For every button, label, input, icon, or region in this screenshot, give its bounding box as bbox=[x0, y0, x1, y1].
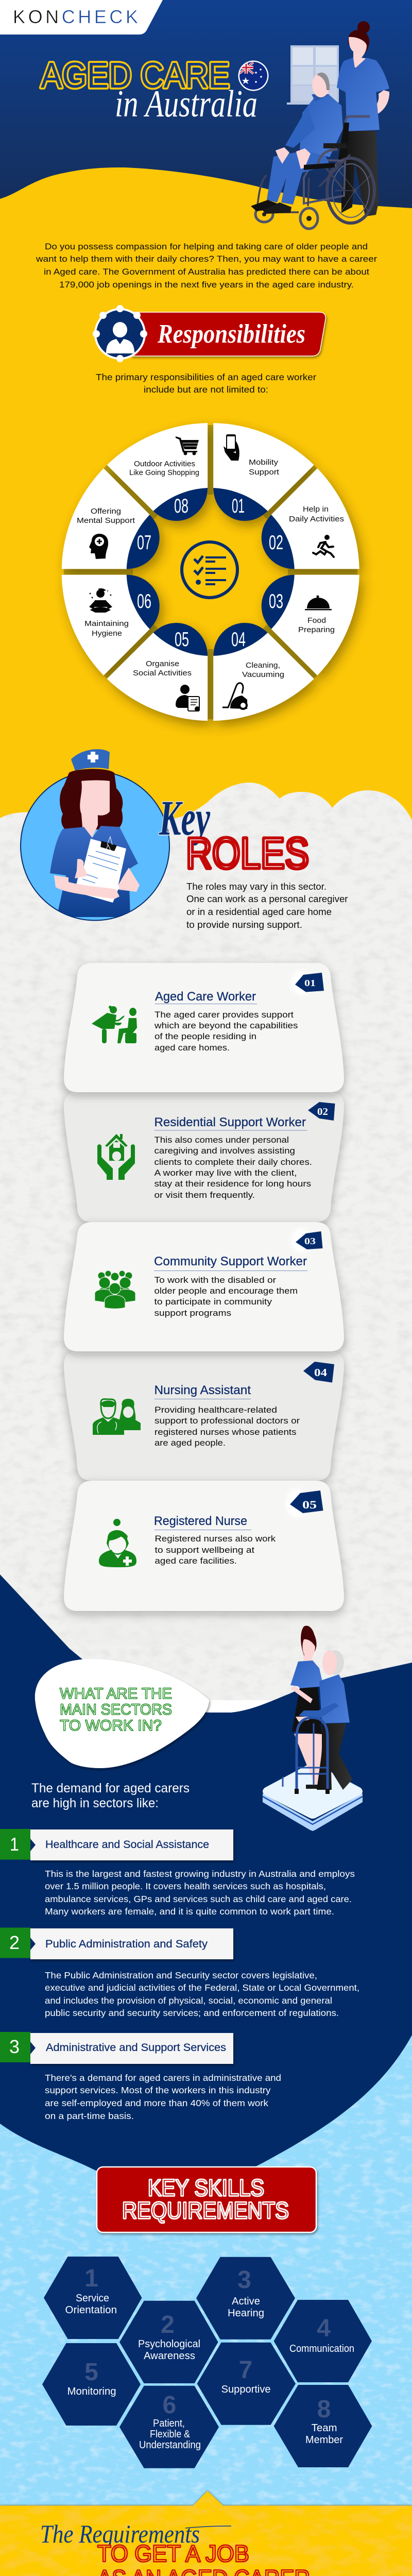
sector 3 bbox=[0, 2032, 281, 2121]
icon: doctor and nurse bbox=[93, 1399, 141, 1435]
wheel labels: Cleaning, bbox=[246, 662, 280, 670]
heading: to get a job as an aged carer bbox=[97, 2540, 310, 2576]
illustration: window bbox=[287, 45, 339, 105]
roles intro text: One can work as a personal caregiver bbox=[186, 894, 348, 904]
sector 1 body: over 1.5 million people. It covers health services such as hospitals, bbox=[45, 1881, 326, 1891]
sector 2 body: and includes the provision of physical, social, economic and general bbox=[45, 1995, 332, 2006]
roles intro text bbox=[186, 882, 348, 930]
body text: which are beyond the capabilities bbox=[154, 1021, 298, 1030]
responsibilities banner: Responsibilities bbox=[157, 319, 305, 349]
responsibilities intro text bbox=[96, 372, 316, 395]
tag 01 bbox=[291, 971, 324, 995]
hexagon 7: Supportive bbox=[221, 2384, 271, 2395]
icon: carer feeding client bbox=[92, 1006, 137, 1043]
wheel labels: Daily Activities bbox=[289, 515, 344, 523]
title: roles: ROLES bbox=[186, 829, 309, 877]
card: residential support worker bbox=[64, 1092, 344, 1222]
hexagon 1 bbox=[44, 2257, 142, 2339]
sector 1 body: This is the largest and fastest growing industry in Australia and employs bbox=[45, 1869, 355, 1879]
responsibilities wheel bbox=[62, 423, 359, 721]
wheel segments bbox=[62, 423, 359, 721]
sector 2 bar: Public Administration and Safety bbox=[45, 1938, 208, 1950]
hexagon 7: 7 bbox=[239, 2357, 252, 2384]
sector 3 body: support services. Most of the workers in this industry bbox=[45, 2085, 271, 2095]
hexagon 3: Active bbox=[232, 2296, 260, 2307]
body text bbox=[154, 1534, 276, 1566]
heading: Aged Care Worker bbox=[155, 990, 256, 1004]
wheel labels: Hygiene bbox=[92, 630, 122, 638]
sector 3 body: There's a demand for aged carers in administrative and bbox=[45, 2073, 281, 2083]
body text: A worker may live with the client, bbox=[154, 1168, 297, 1178]
icon: head with cross bbox=[89, 534, 108, 559]
key skills banner bbox=[97, 2167, 316, 2232]
tag 05: 05 bbox=[302, 1498, 317, 1511]
heading: Residential Support Worker bbox=[154, 1115, 306, 1129]
body text: of the people residing in bbox=[154, 1031, 256, 1041]
wheel labels: Vacuuming bbox=[242, 671, 284, 679]
illustration: carer with walker on platform bbox=[263, 1625, 363, 1831]
sector 3 bar: 3 bbox=[9, 2036, 20, 2057]
demand text: are high in sectors like: bbox=[31, 1796, 159, 1810]
wheel labels: Maintaining bbox=[84, 620, 129, 628]
sector 1 bar: 1 bbox=[10, 1834, 19, 1855]
wheel labels: Food bbox=[307, 617, 326, 625]
wheel labels: Preparing bbox=[298, 626, 335, 634]
script heading: the requirements: The Requirements bbox=[40, 2519, 200, 2548]
roles intro text: The roles may vary in this sector. bbox=[186, 882, 327, 892]
hexagon 7 bbox=[197, 2343, 296, 2425]
navy section background bbox=[0, 1574, 412, 2188]
tag 01: 01 bbox=[304, 978, 316, 988]
body text: support programs bbox=[154, 1308, 231, 1318]
wheel labels bbox=[77, 459, 344, 679]
icon: house in hands bbox=[97, 1134, 135, 1180]
wheel numbers: 07 bbox=[137, 532, 151, 554]
sector 3 body bbox=[45, 2073, 281, 2121]
wheel labels: Help in bbox=[303, 505, 329, 514]
wheel labels: Support bbox=[249, 468, 279, 477]
title: roles: ROLES bbox=[186, 829, 309, 877]
heading: to get a job as an aged carer: TO GET A JOB bbox=[97, 2540, 249, 2567]
responsibilities banner bbox=[93, 305, 325, 362]
tag 03 bbox=[291, 1228, 322, 1253]
sector 1 bbox=[0, 1829, 355, 1917]
intro paragraph: in Aged care. The Government of Australia has predicted there can be about bbox=[44, 267, 369, 277]
intro paragraph bbox=[36, 242, 377, 290]
sector 1 body bbox=[45, 1869, 355, 1917]
icon: australian flag bbox=[238, 61, 269, 91]
icon: runner bbox=[313, 535, 334, 557]
illustration: carer and man in wheelchair bbox=[251, 21, 389, 229]
sector 2 bar: 2 bbox=[9, 1932, 20, 1953]
icon: registered nurse bbox=[99, 1519, 136, 1567]
sector 2 body bbox=[45, 1970, 359, 2018]
sector 1 bar bbox=[0, 1829, 233, 1860]
body text: aged care homes. bbox=[154, 1043, 230, 1053]
hexagon 6: Understanding bbox=[139, 2439, 201, 2451]
wheel numbers: 01 bbox=[232, 495, 245, 517]
header background bbox=[0, 0, 412, 216]
white bubble with heading: MAIN SECTORS bbox=[60, 1701, 172, 1718]
light blue section background bbox=[0, 2009, 412, 2509]
body text: older people and encourage them bbox=[154, 1286, 298, 1296]
logo panel bbox=[0, 0, 163, 35]
body text: are aged people. bbox=[154, 1438, 226, 1448]
sector 2 bbox=[0, 1928, 359, 2018]
white bubble with heading bbox=[35, 1659, 209, 1768]
body text: Registered nurses also work bbox=[154, 1534, 276, 1544]
hexagon 6: Flexible & bbox=[150, 2429, 191, 2440]
body text bbox=[154, 1275, 298, 1318]
wheel numbers: 06 bbox=[137, 590, 151, 613]
logo panel: KONCHECK bbox=[13, 6, 138, 27]
key skills banner: REQUIREMENTS bbox=[122, 2197, 289, 2224]
sector 1 bar: Healthcare and Social Assistance bbox=[45, 1839, 209, 1851]
wheel labels: Like Going Shopping bbox=[129, 469, 199, 477]
sector 3 body: on a part-time basis. bbox=[45, 2111, 134, 2121]
icon: vacuum cleaner bbox=[222, 683, 247, 709]
clipboard bbox=[75, 837, 126, 903]
intro paragraph: want to help them with their daily chores? Then, you may want to have a career bbox=[36, 254, 377, 264]
white bubble with heading: TO WORK IN? bbox=[60, 1717, 162, 1734]
body text: to participate in community bbox=[154, 1297, 272, 1307]
key skills banner: KEY SKILLS bbox=[148, 2175, 264, 2201]
hexagon 2: 2 bbox=[161, 2311, 175, 2338]
card: community support worker bbox=[64, 1222, 344, 1351]
grey paper section background bbox=[0, 783, 412, 1700]
heading: Community Support Worker bbox=[154, 1255, 307, 1268]
tag 02 bbox=[308, 1102, 335, 1121]
wheel numbers: 08 bbox=[174, 495, 188, 517]
wheel numbers bbox=[137, 495, 283, 651]
icon: phone in hand bbox=[224, 434, 239, 461]
icon: meditating person bbox=[89, 588, 112, 613]
body text: registered nurses whose patients bbox=[154, 1427, 297, 1437]
responsibilities intro text: include but are not limited to: bbox=[144, 384, 268, 395]
key skills banner: KEY SKILLS bbox=[148, 2175, 264, 2201]
hexagon 1: Service bbox=[76, 2293, 109, 2304]
key skills banner: REQUIREMENTS bbox=[122, 2197, 289, 2224]
white bubble with heading: WHAT ARE THE bbox=[60, 1685, 172, 1702]
sector 2 body: The Public Administration and Security sector covers legislative, bbox=[45, 1970, 317, 1980]
demand text bbox=[31, 1781, 190, 1810]
sector 2 body: executive and judicial activities of the Federal, State or Local Government, bbox=[45, 1982, 359, 1993]
hexagon 3: Hearing bbox=[228, 2308, 264, 2319]
hexagon 2: Awareness bbox=[144, 2350, 195, 2362]
heading: Registered Nurse bbox=[154, 1514, 247, 1528]
body text bbox=[154, 1405, 300, 1448]
white bubble with heading: TO WORK IN? bbox=[60, 1717, 162, 1734]
hexagon 3: 3 bbox=[237, 2266, 251, 2294]
sector 1 body: ambulance services, GPs and services such as child care and aged care. bbox=[45, 1894, 352, 1904]
hexagon 4: Communication bbox=[289, 2343, 354, 2354]
wheel labels: Mental Support bbox=[77, 517, 135, 525]
sector 3 bar bbox=[0, 2032, 233, 2064]
title: aged care: AGED CARE bbox=[41, 55, 230, 95]
icon: person with clipboard bbox=[176, 685, 200, 711]
body text: stay at their residence for long hours bbox=[154, 1179, 311, 1189]
hexagon 6 bbox=[119, 2386, 219, 2468]
body text: to support wellbeing at bbox=[154, 1545, 254, 1555]
faint paper edge below last card bbox=[64, 1611, 344, 1646]
body text: Providing healthcare-related bbox=[154, 1405, 277, 1415]
wheel labels: Organise bbox=[146, 660, 179, 668]
white bubble with heading: MAIN SECTORS bbox=[60, 1701, 172, 1718]
wheel numbers: 04 bbox=[231, 629, 246, 651]
body text: clients to complete their daily chores. bbox=[154, 1157, 312, 1167]
body text bbox=[154, 1010, 298, 1053]
title: in Australia: in Australia bbox=[115, 83, 258, 125]
hexagon 2 bbox=[119, 2301, 218, 2383]
body text bbox=[154, 1135, 312, 1200]
icon: nurse hat bbox=[71, 749, 110, 771]
card: aged care worker bbox=[64, 963, 344, 1092]
roles intro text: or in a residential aged care home bbox=[186, 907, 332, 917]
tag 02: 02 bbox=[317, 1106, 328, 1117]
intro paragraph: Do you possess compassion for helping and taking care of older people and bbox=[45, 242, 368, 251]
body text: or visit them frequently. bbox=[154, 1190, 255, 1200]
wheel labels: Social Activities bbox=[133, 669, 192, 677]
yellow requirements background bbox=[0, 2491, 412, 2576]
hexagon 4: 4 bbox=[317, 2315, 331, 2342]
title: key: Key bbox=[159, 790, 210, 845]
hexagon 8 bbox=[274, 2385, 372, 2467]
sector 2 bar bbox=[0, 1928, 233, 1959]
hexagon 6: Patient, bbox=[153, 2418, 185, 2429]
hexagon 8: 8 bbox=[317, 2396, 331, 2423]
hexagon 6: 6 bbox=[163, 2392, 176, 2419]
hexagon 8: Team bbox=[312, 2422, 337, 2434]
sector 2 body: public security and security services; and enforcement of regulations. bbox=[45, 2008, 339, 2018]
hexagon 2: Psychological bbox=[138, 2338, 200, 2350]
wheel numbers: 05 bbox=[175, 629, 189, 651]
wheel labels: Offering bbox=[91, 507, 121, 516]
hexagon 4 bbox=[274, 2300, 372, 2382]
hexagon 5: Monitoring bbox=[67, 2386, 116, 2397]
body text: To work with the disabled or bbox=[154, 1275, 276, 1285]
heading: to get a job as an aged carer: TO GET A JOB bbox=[97, 2540, 249, 2567]
icon: shopping cart bbox=[176, 436, 199, 455]
hexagon 5: 5 bbox=[84, 2359, 98, 2386]
tag 04: 04 bbox=[314, 1366, 328, 1379]
wheel labels: Mobility bbox=[249, 459, 279, 467]
body text: The aged carer provides support bbox=[154, 1010, 294, 1020]
body text: aged care facilities. bbox=[154, 1556, 237, 1566]
icon: person in circle bbox=[93, 305, 147, 362]
card: registered nurse bbox=[64, 1481, 344, 1611]
hexagon 3 bbox=[196, 2257, 295, 2340]
card: nursing assistant bbox=[64, 1351, 344, 1481]
body text: This also comes under personal bbox=[154, 1135, 289, 1145]
intro paragraph: 179,000 job openings in the next five years in the aged care industry. bbox=[59, 280, 354, 290]
sector 3 bar: Administrative and Support Services bbox=[46, 2042, 226, 2054]
tag 04 bbox=[303, 1362, 334, 1383]
responsibilities intro text: The primary responsibilities of an aged care worker bbox=[96, 372, 316, 382]
wheel numbers: 02 bbox=[269, 532, 283, 554]
hexagon 1: 1 bbox=[84, 2265, 98, 2292]
hexagon 1: Orientation bbox=[65, 2304, 117, 2316]
roles intro text: to provide nursing support. bbox=[186, 920, 302, 930]
illustration: nurse in circle bbox=[21, 749, 169, 920]
hexagon 5 bbox=[42, 2343, 141, 2426]
wheel labels: Outdoor Activities bbox=[134, 460, 195, 468]
sector 3 body: are self-employed and more than 40% of them work bbox=[45, 2098, 268, 2108]
demand text: The demand for aged carers bbox=[31, 1781, 190, 1795]
tag 03: 03 bbox=[304, 1236, 316, 1246]
sector 1 body: Many workers are female, and it is quite common to work part time. bbox=[45, 1906, 334, 1917]
icon: community group bbox=[95, 1270, 135, 1309]
hexagon 8: Member bbox=[305, 2434, 343, 2446]
tag 05 bbox=[286, 1489, 323, 1518]
body text: support to professional doctors or bbox=[154, 1416, 300, 1426]
icon: food cloche bbox=[305, 596, 332, 610]
yellow section background bbox=[0, 167, 412, 876]
white bubble with heading: WHAT ARE THE bbox=[60, 1685, 172, 1702]
body text: caregiving and involves assisting bbox=[154, 1146, 295, 1156]
icon: checklist bbox=[182, 542, 237, 598]
wheel numbers: 03 bbox=[269, 590, 283, 613]
heading: Nursing Assistant bbox=[154, 1383, 251, 1397]
